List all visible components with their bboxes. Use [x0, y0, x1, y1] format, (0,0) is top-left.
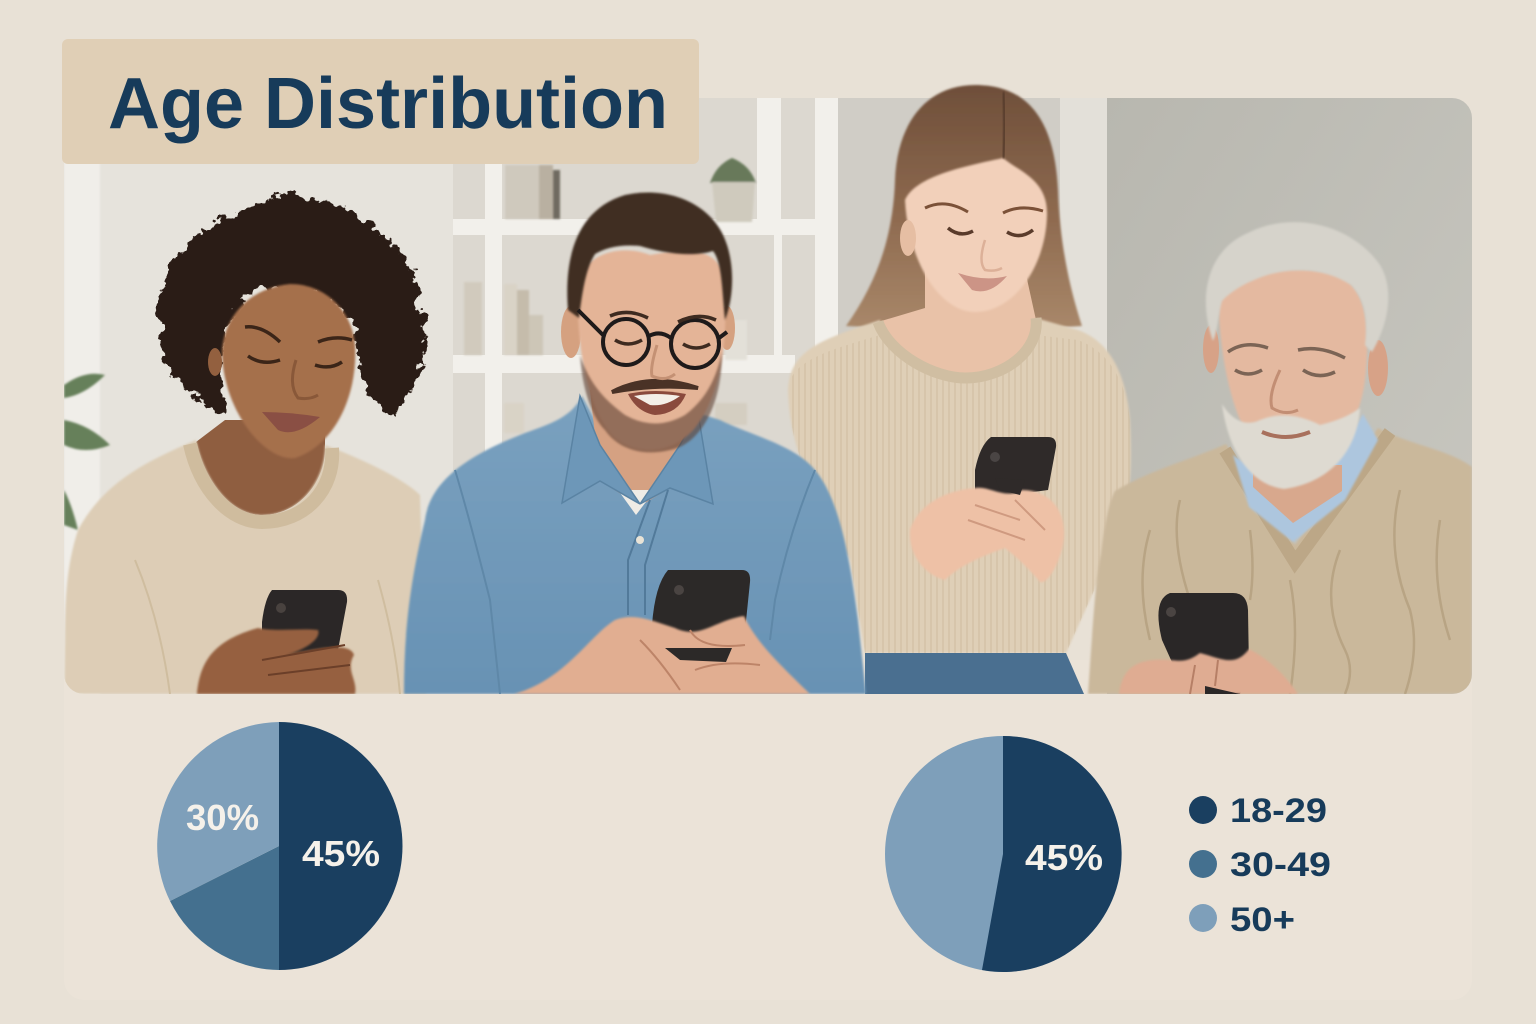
finger lines	[262, 645, 350, 675]
neck and chest	[196, 420, 325, 515]
pie chart: right	[885, 736, 1122, 972]
stubble beard	[580, 352, 722, 452]
sweater	[788, 318, 1131, 653]
jeans	[865, 653, 1084, 694]
nose	[652, 345, 675, 379]
collar ribbing	[1225, 432, 1390, 562]
phone	[652, 570, 750, 660]
person 1: woman with curly hair	[64, 194, 426, 694]
phone shadow between fingers	[1008, 488, 1022, 495]
hair parting	[1003, 92, 1004, 158]
pie chart: left	[157, 722, 402, 970]
face	[905, 158, 1047, 312]
hair	[1206, 222, 1388, 352]
grey wall section	[838, 98, 1060, 334]
hand	[197, 628, 355, 694]
face	[578, 250, 725, 450]
person 3: young woman, standing	[788, 85, 1131, 694]
finger lines	[1190, 660, 1218, 694]
placket	[628, 490, 668, 615]
glasses	[578, 310, 727, 368]
ears	[561, 306, 581, 358]
neck and chest	[883, 272, 1036, 372]
ear	[900, 220, 916, 256]
label: 45%: 45%	[302, 833, 380, 874]
cable knit	[1142, 490, 1450, 694]
hair	[567, 192, 732, 320]
slice: 50+, 30%	[157, 722, 279, 901]
teeth	[634, 394, 680, 405]
neck	[590, 390, 700, 506]
phone	[1158, 593, 1249, 694]
beard	[1222, 404, 1360, 489]
mouth	[262, 412, 320, 432]
collar rib	[878, 318, 1036, 378]
right grey wall	[1107, 98, 1472, 698]
shirt collar	[562, 396, 640, 504]
photo: four people using phones	[64, 85, 1472, 694]
phone between fingers	[1205, 686, 1240, 694]
panel: lower chart area	[64, 660, 1472, 1000]
slice: 50+	[885, 736, 1121, 972]
slice: 18-29, 45%	[982, 736, 1122, 972]
title text: Age Distribution	[108, 64, 668, 144]
sleeve seams	[455, 470, 815, 694]
eyebrows and eyes	[1228, 345, 1345, 376]
slice: 18-29, 45%	[279, 722, 402, 970]
sweater ribbing	[788, 335, 1131, 653]
eyebrows and eyes	[610, 312, 716, 348]
books	[464, 165, 747, 433]
sweater	[64, 440, 426, 694]
buttons	[636, 536, 644, 544]
legend item: 30-49	[1189, 846, 1331, 884]
label: 30%: 30%	[186, 797, 259, 838]
face	[222, 284, 355, 458]
hands	[910, 488, 1064, 582]
hair	[158, 194, 425, 416]
legend	[1189, 792, 1331, 939]
phone	[975, 437, 1056, 500]
shelf frame	[453, 98, 838, 458]
pale column	[1060, 98, 1107, 351]
person 4: older man, cable-knit sweater	[1088, 222, 1472, 694]
mouth	[628, 391, 686, 415]
title background	[62, 39, 699, 164]
legend item: 50+: 50+	[1230, 901, 1295, 939]
undershirt	[618, 490, 655, 515]
hair	[846, 85, 1082, 330]
label: 45%: 45%	[1025, 837, 1103, 878]
ears	[1203, 325, 1219, 373]
finger lines	[640, 630, 760, 690]
shirt collar	[1233, 414, 1378, 542]
shirt collar right	[640, 413, 713, 504]
shirt	[404, 396, 866, 694]
sleeve fold	[135, 560, 400, 694]
collar rib	[190, 444, 332, 522]
left wall	[64, 98, 464, 698]
photo background: room with shelves	[64, 98, 1472, 698]
legend item: 18-29	[1189, 792, 1327, 830]
sweater	[1088, 428, 1472, 694]
phone between fingers	[665, 648, 732, 662]
hands	[1119, 649, 1298, 694]
mouth	[1262, 432, 1310, 437]
camera	[276, 603, 286, 613]
eyebrows and eyes	[925, 204, 1043, 213]
camera	[990, 452, 1000, 462]
nose	[982, 240, 1002, 271]
potted plant	[710, 158, 756, 222]
nose	[1271, 370, 1298, 413]
ear	[208, 348, 222, 376]
phone	[262, 590, 347, 660]
nose	[292, 360, 318, 399]
finger lines	[968, 500, 1045, 540]
legend item: 18-29: 18-29	[1230, 792, 1327, 830]
eyebrows and eyes	[245, 327, 352, 367]
legend item: 30-49: 30-49	[1230, 846, 1331, 884]
bookshelf back	[453, 98, 815, 471]
side plant	[64, 374, 110, 530]
hands	[514, 616, 810, 694]
camera	[674, 585, 684, 595]
moustache	[612, 381, 698, 392]
camera	[1166, 607, 1176, 617]
face	[1218, 269, 1367, 470]
curtain	[64, 164, 100, 602]
neck	[1253, 465, 1342, 523]
title banner	[62, 39, 699, 164]
mouth	[958, 273, 1007, 291]
person 2: man with glasses, denim shirt	[404, 192, 866, 694]
slice: 30-49	[170, 846, 279, 970]
legend item: 50+	[1189, 901, 1295, 939]
